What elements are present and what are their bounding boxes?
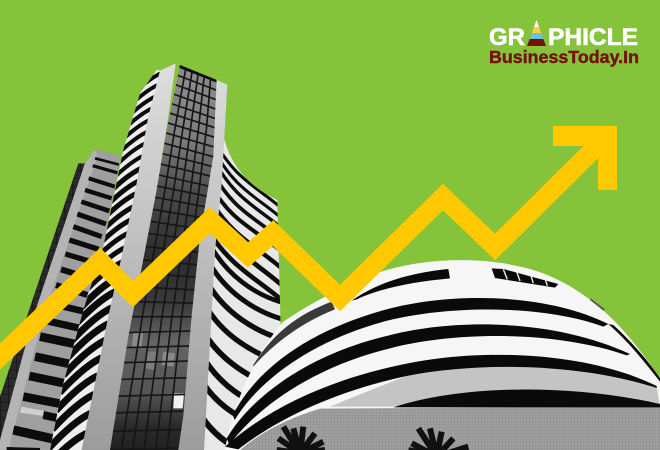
right concrete column [178,80,227,450]
dome building [225,260,660,450]
left tower [0,149,121,450]
palm left [277,427,325,450]
palm right [408,428,470,450]
logo [489,20,639,67]
left striped wing [45,70,161,450]
main tower [45,31,282,450]
glass curtain wall [110,65,217,450]
curved right wing [197,138,282,450]
dome windows dividers [503,269,547,286]
wall band shading [330,367,660,407]
left concrete column [82,63,176,450]
lit windows [20,407,43,416]
logo word: graphicle: PHICLE [548,24,638,51]
logo word: graphicle: GR [489,24,525,51]
logo pyramid icon [527,20,546,46]
logo word: businesstoday.in: BusinessToday.In [489,47,639,67]
logo word: graphicle [489,24,638,51]
rising yellow trend line [0,126,617,368]
